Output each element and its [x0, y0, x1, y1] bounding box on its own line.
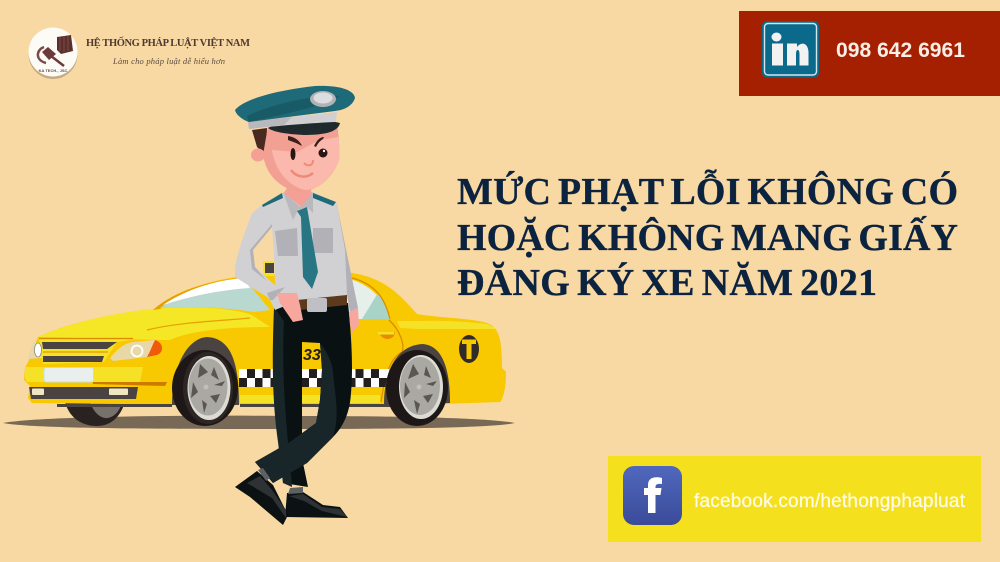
car lower sill — [57, 404, 395, 407]
rear deck highlight — [397, 321, 497, 329]
logo: Hệ thống pháp luật Việt Nam: Làm cho pháp luật dễ hiểu hơn — [112, 56, 225, 66]
title — [457, 169, 958, 304]
roof edge — [153, 276, 262, 310]
headlight — [110, 340, 162, 361]
collar — [283, 192, 313, 220]
back leg — [273, 307, 308, 487]
contact panel: Facebook — [608, 456, 981, 542]
officer head — [251, 124, 340, 192]
front bumper highlight — [25, 367, 143, 382]
car body — [24, 273, 506, 404]
far front wheel — [65, 402, 125, 426]
license plate — [44, 368, 94, 382]
roof sign — [263, 261, 274, 276]
seat number on taxi: 33 — [303, 347, 321, 364]
neck — [284, 186, 312, 207]
belt and buckle — [297, 295, 347, 312]
officer trousers — [255, 303, 352, 487]
officer left hand — [349, 308, 359, 333]
front wheel — [172, 337, 239, 426]
officer hat — [235, 86, 355, 135]
epaulettes — [262, 193, 336, 207]
title: HOẶC KHÔNG MANG GIẤY — [457, 216, 958, 259]
illustration: yellow taxi — [3, 261, 515, 429]
icon: Facebook — [623, 466, 682, 525]
shirt cuff — [267, 287, 285, 300]
Facebook address: facebook.com/hethongphapluat — [694, 491, 966, 512]
illustration: traffic officer — [235, 86, 359, 525]
checker stripe — [239, 369, 389, 387]
rear wheel — [384, 344, 450, 426]
windshield — [160, 278, 270, 312]
hood highlight — [38, 307, 270, 340]
officer right hand — [277, 293, 303, 322]
lower door highlight — [240, 395, 380, 403]
lower air intake — [29, 387, 138, 399]
logo: Hệ thống pháp luật Việt Nam: KA TECH., JSC — [39, 68, 67, 73]
officer shoes — [235, 468, 348, 525]
door lines and handle — [381, 320, 403, 402]
pelvis and crossing leg — [255, 303, 352, 483]
phone number: 098 642 6961 — [836, 39, 965, 62]
necktie — [297, 207, 318, 289]
side stripe — [93, 382, 167, 386]
title: MỨC PHẠT LỖI KHÔNG CÓ — [457, 169, 958, 213]
grille — [28, 338, 133, 364]
icon: LinkedIn — [762, 21, 819, 78]
car shadow — [3, 416, 515, 429]
officer shirt — [235, 192, 358, 312]
logo: Hệ thống pháp luật Việt Nam — [28, 28, 250, 79]
shirt pockets — [275, 228, 333, 256]
shirt sleeve shading — [250, 205, 358, 312]
rear side window — [340, 278, 390, 319]
logo: Hệ thống pháp luật Việt Nam: HỆ THỐNG PHÁP LUẬT VIỆT NAM — [86, 36, 250, 49]
contact panel: LinkedIn and phone — [739, 11, 1000, 96]
title: ĐĂNG KÝ XE NĂM 2021 — [457, 262, 877, 304]
taxi badge T — [459, 335, 479, 363]
hood crease — [147, 318, 250, 330]
